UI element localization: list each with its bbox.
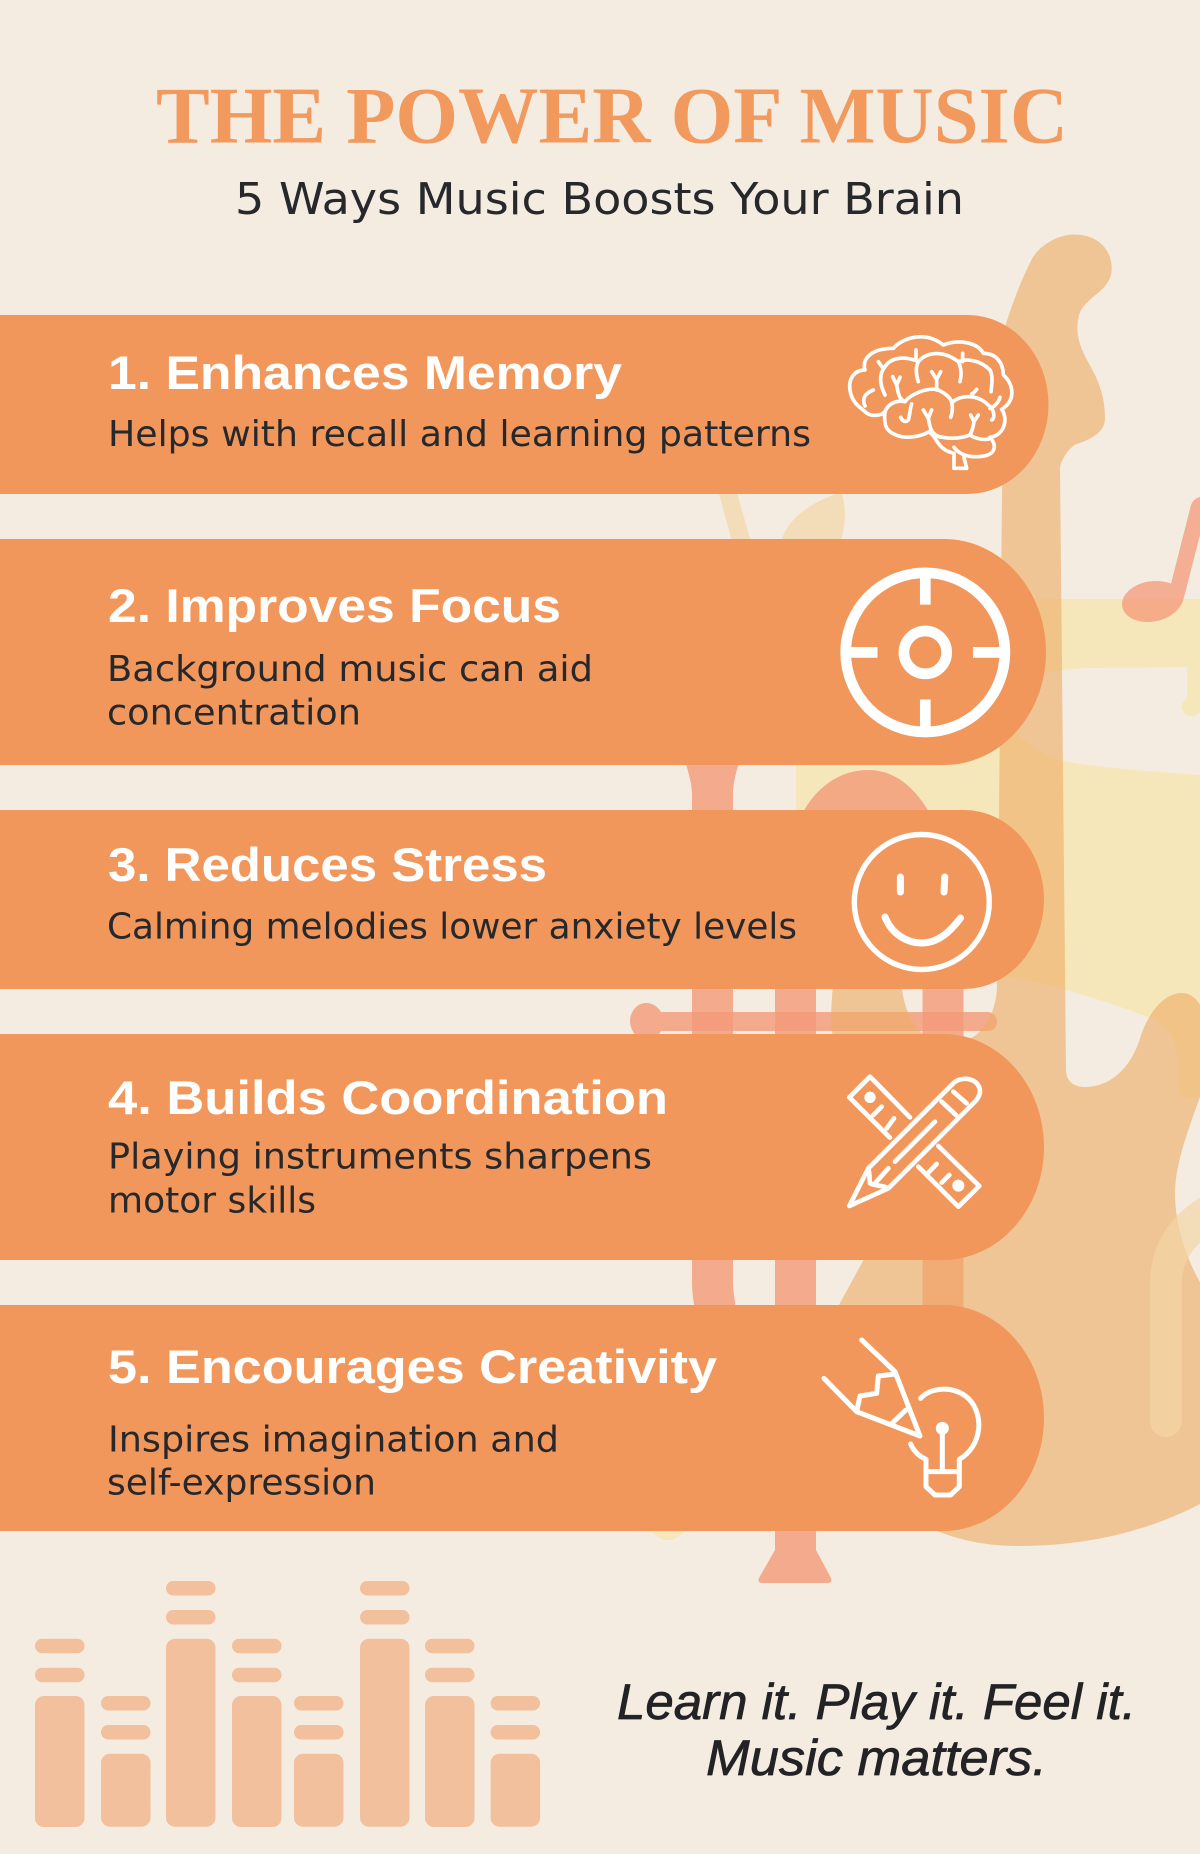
closing tagline: Music matters.: [706, 1730, 1047, 1786]
pale band on guitar body: [1150, 1198, 1200, 1437]
panel: 3. Reduces Stress: [0, 810, 1044, 989]
equalizer graphic: [35, 1581, 540, 1827]
music note: [1122, 497, 1200, 622]
yellow note fragment: [650, 1506, 686, 1540]
subtitle: 5 Ways Music Boosts Your Brain: [235, 174, 964, 225]
trumpet: [630, 760, 997, 1583]
title: THE POWER OF MUSIC: [156, 72, 1068, 160]
heading: 1. Enhances Memory: [108, 347, 623, 400]
panel: 2. Improves Focus: concentration: [107, 692, 361, 734]
description: Calming melodies lower anxiety levels: [107, 906, 797, 948]
description: Inspires imagination and: [108, 1420, 559, 1460]
description: Background music can aid: [107, 649, 593, 690]
description: Playing instruments sharpens: [108, 1136, 652, 1178]
yellow drum shape: [796, 599, 1200, 1097]
heading: 3. Reduces Stress: [108, 839, 547, 892]
tan stick and leaf: [718, 490, 845, 545]
heading: 4. Builds Coordination: [108, 1072, 668, 1125]
icon: target: [846, 573, 1005, 732]
icon: pencil and ruler: [849, 1077, 980, 1207]
closing tagline: Learn it. Play it. Feel it.: [617, 1674, 1136, 1730]
icon: pencil and lightbulb: [824, 1340, 979, 1495]
heading: 2. Improves Focus: [108, 580, 561, 633]
icon: brain: [850, 337, 1012, 468]
closing tagline: [617, 1674, 1136, 1786]
background illustration: music instruments: [630, 234, 1200, 1583]
guitar: [700, 234, 1200, 1546]
icon: smiley: [854, 834, 989, 970]
panel: 5. Encourages Creativity: [0, 1305, 1044, 1531]
panel: 4. Builds Coordination: [0, 1034, 1044, 1260]
panel: 4. Builds Coordination: motor skills: [108, 1180, 316, 1222]
panel: 5. Encourages Creativity: self-expression: [107, 1462, 376, 1504]
description: Helps with recall and learning patterns: [108, 414, 811, 455]
panel: 2. Improves Focus: [0, 539, 1046, 765]
heading: 5. Encourages Creativity: [108, 1341, 718, 1394]
panel: 1. Enhances Memory: [0, 315, 1048, 494]
